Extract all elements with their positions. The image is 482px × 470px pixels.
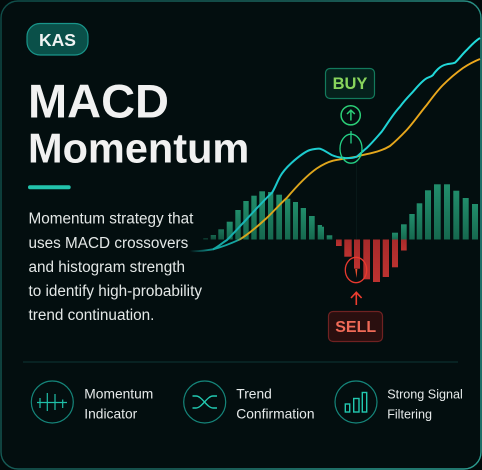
accent underline [28, 185, 71, 189]
green bars: left hump [203, 191, 332, 240]
label: momentum indicator [84, 386, 153, 422]
icon: momentum ticks [31, 381, 73, 423]
description text: trend continuation. [28, 307, 154, 324]
feature: trend confirmation [184, 381, 315, 423]
BUY label: BUY [333, 75, 367, 93]
red bars: negative histogram [336, 240, 407, 282]
description text [28, 210, 202, 324]
feature: strong signal filtering [335, 381, 463, 423]
SELL label: SELL [335, 319, 376, 336]
arrow: sell up arrow [351, 292, 362, 305]
description text: and histogram strength [28, 259, 185, 276]
buy crossover marker [340, 131, 362, 163]
signal line: orange [213, 59, 480, 249]
description text: Momentum strategy that [28, 210, 194, 228]
buy signal [326, 68, 374, 163]
badge: KAS [27, 24, 88, 55]
label: strong signal filtering: Strong Signal [387, 388, 463, 402]
label: trend confirmation [236, 386, 315, 422]
label: trend confirmation: Trend [236, 386, 272, 402]
label: momentum indicator: Indicator [84, 406, 138, 422]
icon: crossing curves [184, 381, 226, 423]
histogram chart [203, 184, 478, 282]
green bars: right hump [392, 184, 478, 240]
title: MACD [28, 74, 169, 127]
description text: uses MACD crossovers [28, 235, 189, 252]
label: momentum indicator: Momentum [84, 386, 153, 402]
title [28, 74, 249, 171]
sell signal [328, 257, 382, 342]
feature: momentum indicator [31, 381, 153, 423]
MACD line: cyan [190, 38, 480, 251]
icon: up arrow in circle [341, 106, 360, 125]
title: Momentum [28, 124, 249, 171]
label: strong signal filtering: Filtering [387, 408, 432, 422]
label: strong signal filtering [387, 388, 463, 422]
label: trend confirmation: Confirmation [236, 406, 315, 422]
sell crossover marker [345, 257, 367, 283]
badge: KAS: KAS [39, 30, 76, 50]
description text: to identify high-probability [28, 283, 202, 300]
icon: signal bars [335, 381, 377, 423]
